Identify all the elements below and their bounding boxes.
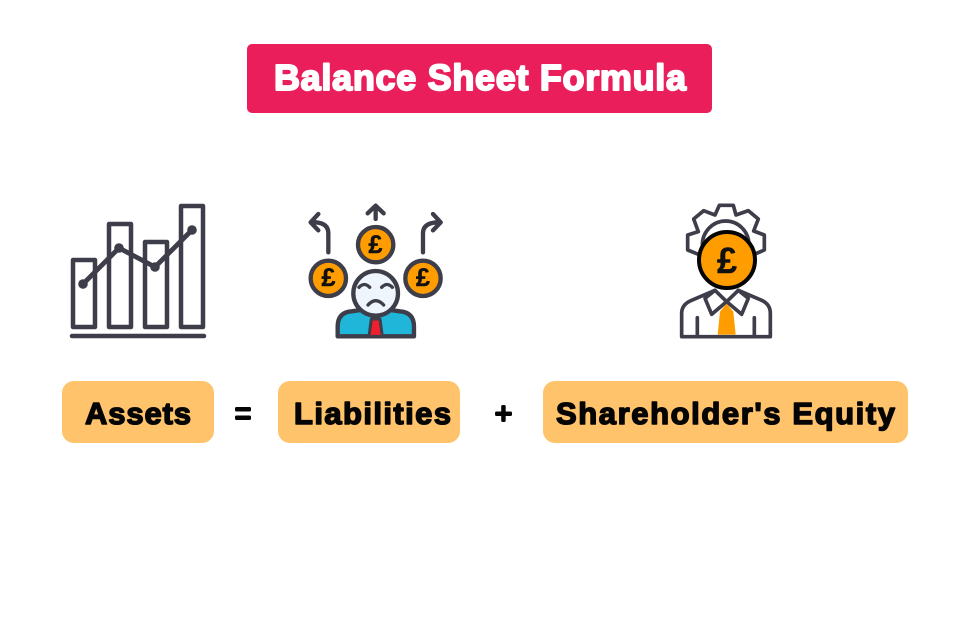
head (353, 271, 398, 316)
label: Shareholder's Equity: Shareholder's Equity (556, 396, 896, 431)
icon: worried person with pound coins (311, 206, 441, 336)
coin (699, 232, 755, 288)
gear (688, 205, 764, 254)
plus sign (495, 405, 512, 422)
tie (718, 304, 736, 335)
icon: assets bar chart with trend line (72, 206, 204, 336)
label: Liabilities: Liabilities (294, 396, 451, 431)
icon: worried person with pound coins: £ (322, 264, 336, 292)
equals sign (235, 407, 251, 420)
body (338, 310, 414, 336)
label: Shareholder's Equity (543, 381, 908, 443)
label: Assets: Assets (85, 396, 191, 431)
title: Balance Sheet Formula (274, 57, 687, 98)
icon: shareholder with gear and pound coin: £ (717, 240, 737, 281)
label: Assets (62, 381, 214, 443)
icon: worried person with pound coins: £ (369, 231, 383, 259)
title (247, 44, 712, 113)
coins (311, 261, 346, 296)
icon: worried person with pound coins: £ (416, 264, 430, 292)
shirt (682, 290, 770, 337)
icon: shareholder with gear and pound coin (682, 205, 770, 337)
arrows (311, 214, 328, 252)
label: Liabilities (278, 381, 460, 443)
